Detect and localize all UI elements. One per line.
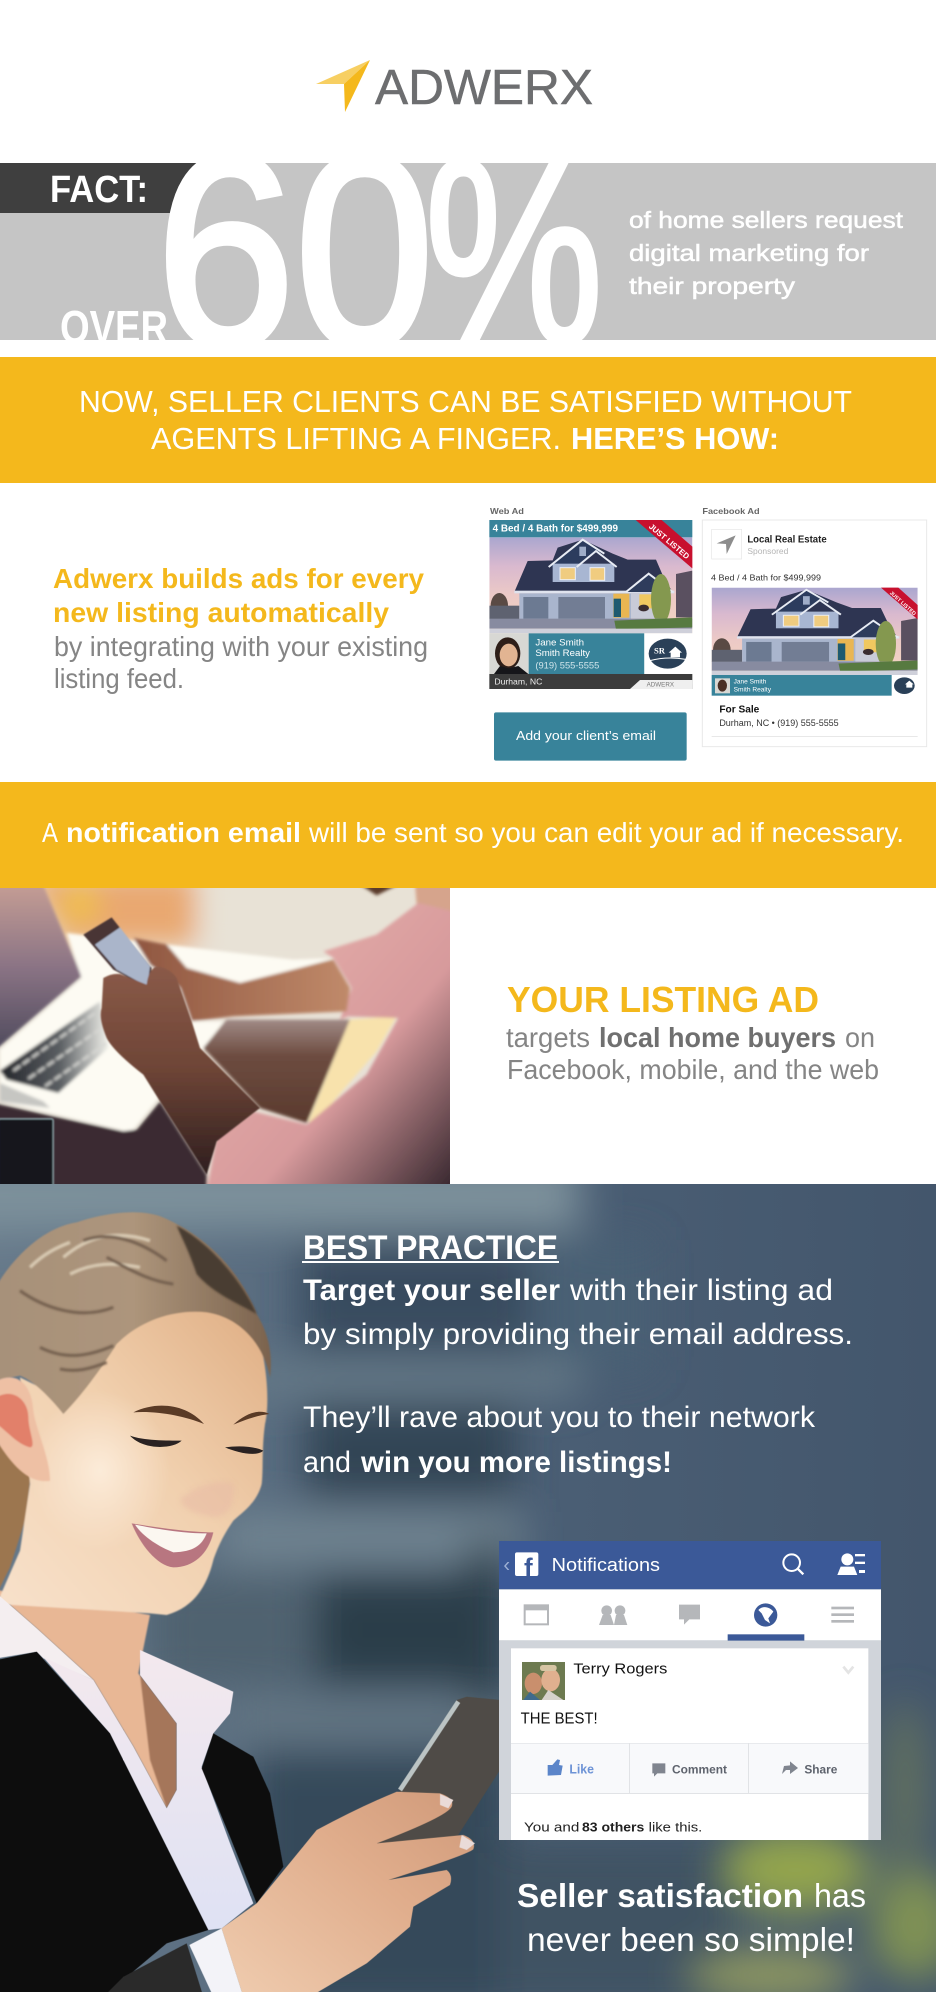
- text block: ads built automatically: new listing automatically: [53, 597, 389, 628]
- dark table: [0, 1101, 207, 1191]
- ear: [0, 1377, 50, 1481]
- text block: ads built automatically: by integrating with your existing: [54, 631, 428, 662]
- header bar: [499, 1541, 881, 1589]
- just listed ribbon: JUST LISTED: [888, 590, 917, 617]
- nose shadow: [182, 1486, 230, 1516]
- big statistic: 60%: [62, 163, 598, 340]
- logo wordmark: ADWERX: [375, 61, 593, 115]
- post card: Terry Rogers: [573, 1661, 667, 1677]
- hair: [0, 1212, 271, 1414]
- panel: notification band: [0, 782, 936, 888]
- label: Web Ad: Web Ad: [490, 506, 524, 516]
- woman's face and hair: [0, 1212, 271, 1808]
- collar: [0, 1593, 93, 1680]
- text block: target your seller: with their listing ad: [569, 1274, 833, 1307]
- facebook ad: For Sale: [719, 704, 760, 715]
- eyebrows and eyes: [130, 1406, 269, 1454]
- description: targets: [506, 1022, 590, 1053]
- like, comment, share row: Share: [804, 1762, 838, 1776]
- yellow band: [0, 782, 936, 888]
- just listed ribbon: JUST LISTED: [647, 522, 691, 561]
- text block: ads built automatically: listing feed.: [54, 663, 184, 694]
- neck and chest: [0, 1590, 177, 1808]
- back hair: [0, 1445, 30, 1588]
- heading: YOUR LISTING AD: [507, 979, 819, 1020]
- statistic description: digital marketing for: [629, 240, 869, 266]
- statistic description: of home sellers request: [629, 207, 904, 233]
- tablet on table: [0, 1119, 53, 1189]
- web ad: [489, 520, 692, 689]
- banner text: NOW, SELLER CLIENTS CAN BE SATISFIED WITHOUT: [79, 384, 852, 419]
- agent strip: Jane Smith: [734, 679, 767, 686]
- logo: Adwerx: [316, 60, 593, 115]
- text block: ads built automatically: [53, 563, 428, 694]
- realty logo: SR: [654, 645, 666, 655]
- facebook notification screenshot: [499, 1541, 881, 1840]
- heading: best practice: BEST PRACTICE: [303, 1229, 558, 1267]
- description: on: [845, 1022, 875, 1053]
- notification text: notification email: [66, 817, 301, 848]
- header bar: ‹: [503, 1555, 510, 1577]
- statistic description: [629, 207, 904, 299]
- banner text: [79, 384, 852, 456]
- photo: smiling woman with phone: [0, 1212, 500, 1992]
- agent info: [529, 633, 644, 674]
- ad footer: [489, 674, 692, 689]
- ad house photo: [712, 588, 918, 675]
- like, comment, share row: Like: [569, 1762, 594, 1776]
- like, comment, share row: Comment: [672, 1762, 727, 1776]
- photo: person using phone at laptop: [0, 875, 453, 1191]
- big statistic: 60%: %: [425, 105, 603, 398]
- blurred building background: [0, 1160, 936, 1992]
- web ad: Smith Realty: [535, 648, 590, 658]
- avatar: [522, 1662, 565, 1700]
- man's head: [360, 888, 397, 898]
- text block: seller satisfaction: Seller satisfaction: [517, 1877, 803, 1914]
- like, comment, share row: [511, 1743, 868, 1794]
- face: [0, 1309, 267, 1615]
- big statistic: 60%: OVER: [60, 301, 168, 353]
- text block: your listing ad: [506, 979, 879, 1085]
- text block: seller satisfaction: never been so simple!: [527, 1921, 855, 1958]
- smile: [132, 1523, 213, 1567]
- panel: here's how banner: [0, 357, 936, 483]
- woman's body and hand: [0, 1593, 500, 1992]
- jacket: [0, 1652, 208, 1992]
- agent photo: [489, 633, 529, 674]
- web ad: ADWERX: [647, 683, 674, 689]
- wood table: [203, 1020, 350, 1123]
- near arm and hand: [101, 966, 260, 1175]
- header bar: f: [524, 1553, 533, 1583]
- notification text: [42, 817, 904, 848]
- panel: ad examples: [489, 506, 927, 761]
- bright cheek: [49, 1406, 156, 1530]
- text block: target your seller: win you more listings!: [360, 1446, 672, 1479]
- agent strip: Smith Realty: [734, 686, 772, 693]
- icon: arrow: [316, 60, 370, 112]
- banner background: [0, 163, 936, 340]
- tab bar: [499, 1589, 881, 1840]
- panel: best practice: [0, 1160, 936, 1992]
- like count: like this.: [649, 1820, 702, 1835]
- facebook ad: 4 Bed / 4 Bath for $499,999: [711, 573, 821, 583]
- text block: ads built automatically: Adwerx builds ads for every: [53, 563, 424, 594]
- header bar: Notifications: [552, 1554, 660, 1575]
- fact label tab: [0, 163, 212, 213]
- like count: [524, 1820, 702, 1835]
- agent strip: [712, 675, 915, 696]
- sleeve and cuff: [103, 1943, 203, 1992]
- ad house photo: [489, 537, 692, 633]
- text block: seller satisfaction: [517, 1877, 866, 1958]
- label: Facebook Ad: Facebook Ad: [702, 506, 760, 516]
- post card: THE BEST!: [521, 1710, 598, 1727]
- jacket far side: [202, 1733, 283, 1903]
- heading: FACT: FACT:: [50, 169, 148, 211]
- text block: target your seller: [303, 1274, 853, 1479]
- ad headline bar: [489, 520, 692, 537]
- text block: target your seller: and: [303, 1446, 351, 1479]
- icon: sponsor arrow: [712, 529, 742, 559]
- web ad: Jane Smith: [535, 637, 584, 647]
- facebook ad: Local Real Estate: [747, 535, 827, 546]
- like count: You and: [524, 1820, 579, 1835]
- pink shirt: [207, 903, 453, 1191]
- light floor: [308, 1016, 397, 1125]
- banner text: HERE’S HOW:: [571, 421, 779, 456]
- description: Facebook, mobile, and the web: [507, 1054, 879, 1085]
- phone: [377, 1697, 500, 1880]
- phone: [83, 917, 152, 988]
- description: [506, 1022, 879, 1085]
- panel: fact banner: [0, 163, 936, 340]
- like count: 83 others: [582, 1820, 644, 1835]
- shirt: [43, 1650, 253, 1930]
- text block: target your seller: They’ll rave about you to their network: [303, 1401, 816, 1434]
- far arm: [133, 938, 350, 1021]
- keyboard: [0, 1001, 108, 1093]
- notification text: A: [42, 817, 58, 848]
- laptop screen: [0, 881, 82, 1051]
- web ad: Durham, NC: [494, 677, 542, 687]
- just listed ribbon: [881, 588, 918, 619]
- facebook ad: Durham, NC • (919) 555-5555: [719, 718, 839, 728]
- description: local home buyers: [599, 1022, 836, 1053]
- facebook ad: [702, 520, 927, 747]
- text block: target your seller: by simply providing their email address.: [303, 1318, 853, 1351]
- hand: [222, 1792, 474, 1992]
- banner text: AGENTS LIFTING A FINGER.: [151, 421, 561, 456]
- web ad: 4 Bed / 4 Bath for $499,999: [493, 524, 619, 535]
- web ad: (919) 555-5555: [535, 660, 599, 670]
- text block: target your seller: Target your seller: [303, 1274, 560, 1307]
- yellow band: [0, 357, 936, 483]
- statistic description: their property: [629, 273, 796, 299]
- text block: seller satisfaction: has: [814, 1877, 866, 1914]
- facebook ad: Sponsored: [747, 546, 789, 556]
- notification text: will be sent so you can edit your ad if necessary.: [308, 817, 904, 848]
- just listed ribbon: [636, 520, 692, 568]
- realty logo: [644, 633, 692, 674]
- post card: [511, 1648, 868, 1840]
- button: add client email: [494, 712, 687, 761]
- button: add client email: Add your client’s email: [516, 728, 656, 743]
- bright table and laptop body: [0, 933, 333, 1131]
- big statistic: 60%: 60: [156, 99, 434, 405]
